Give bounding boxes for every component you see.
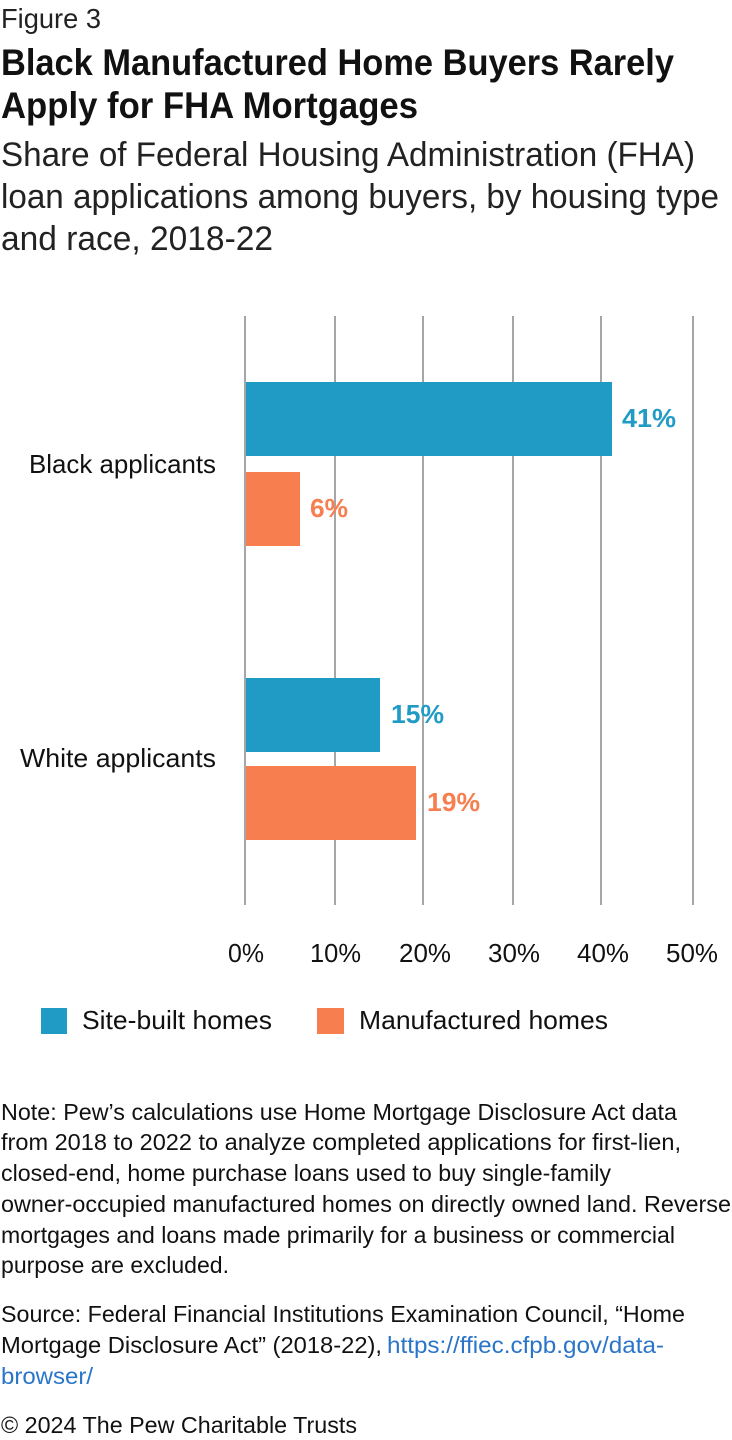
subtitle: and race, 2018-22	[1, 220, 273, 258]
bar chart	[20, 316, 718, 968]
subtitle: Share of Federal Housing Administration (FHA)	[1, 136, 695, 174]
x axis labels	[228, 938, 718, 968]
x axis labels: 10%	[310, 938, 361, 968]
legend: Manufactured homes	[359, 1005, 608, 1035]
title: Black Manufactured Home Buyers Rarely	[1, 42, 674, 83]
legend	[41, 1005, 608, 1035]
note: from 2018 to 2022 to analyze completed applications for first-lien,	[1, 1129, 681, 1155]
group: White applicants: 19%	[427, 787, 480, 817]
note: mortgages and loans made primarily for a business or commercial	[1, 1222, 675, 1248]
group: Black applicants: 6%	[310, 493, 348, 523]
note: Note: Pew’s calculations use Home Mortgage Disclosure Act data	[1, 1099, 677, 1125]
group: White applicants: 15%	[391, 699, 444, 729]
source: https://ffiec.cfpb.gov/data-	[387, 1332, 664, 1358]
group: Black applicants: 41%	[622, 403, 676, 433]
subtitle	[1, 136, 719, 258]
note: purpose are excluded.	[1, 1252, 229, 1278]
source: Source: Federal Financial Institutions Examination Council, “Home	[1, 1301, 685, 1327]
figure label: Figure 3	[1, 3, 101, 34]
group: White applicants: White applicants	[20, 743, 216, 773]
source	[1, 1301, 685, 1389]
group: Black applicants: Black applicants	[29, 449, 216, 479]
title	[1, 42, 674, 126]
x axis labels: 30%	[488, 938, 540, 968]
copyright: © 2024 The Pew Charitable Trusts	[1, 1412, 357, 1438]
title: Apply for FHA Mortgages	[1, 85, 418, 126]
group: White applicants	[20, 678, 480, 840]
note	[1, 1099, 731, 1278]
x axis labels: 20%	[399, 938, 451, 968]
note: owner-occupied manufactured homes on directly owned land. Reverse	[1, 1191, 731, 1217]
x axis labels: 0%	[228, 938, 264, 968]
source: Mortgage Disclosure Act” (2018-22),	[1, 1332, 382, 1358]
x axis labels: 40%	[577, 938, 629, 968]
source: browser/	[1, 1363, 94, 1389]
legend: Site-built homes	[82, 1005, 272, 1035]
subtitle: loan applications among buyers, by housing type	[1, 178, 719, 216]
x axis labels: 50%	[666, 938, 718, 968]
group: Black applicants	[29, 382, 676, 546]
note: closed-end, home purchase loans used to buy single-family	[1, 1160, 611, 1186]
